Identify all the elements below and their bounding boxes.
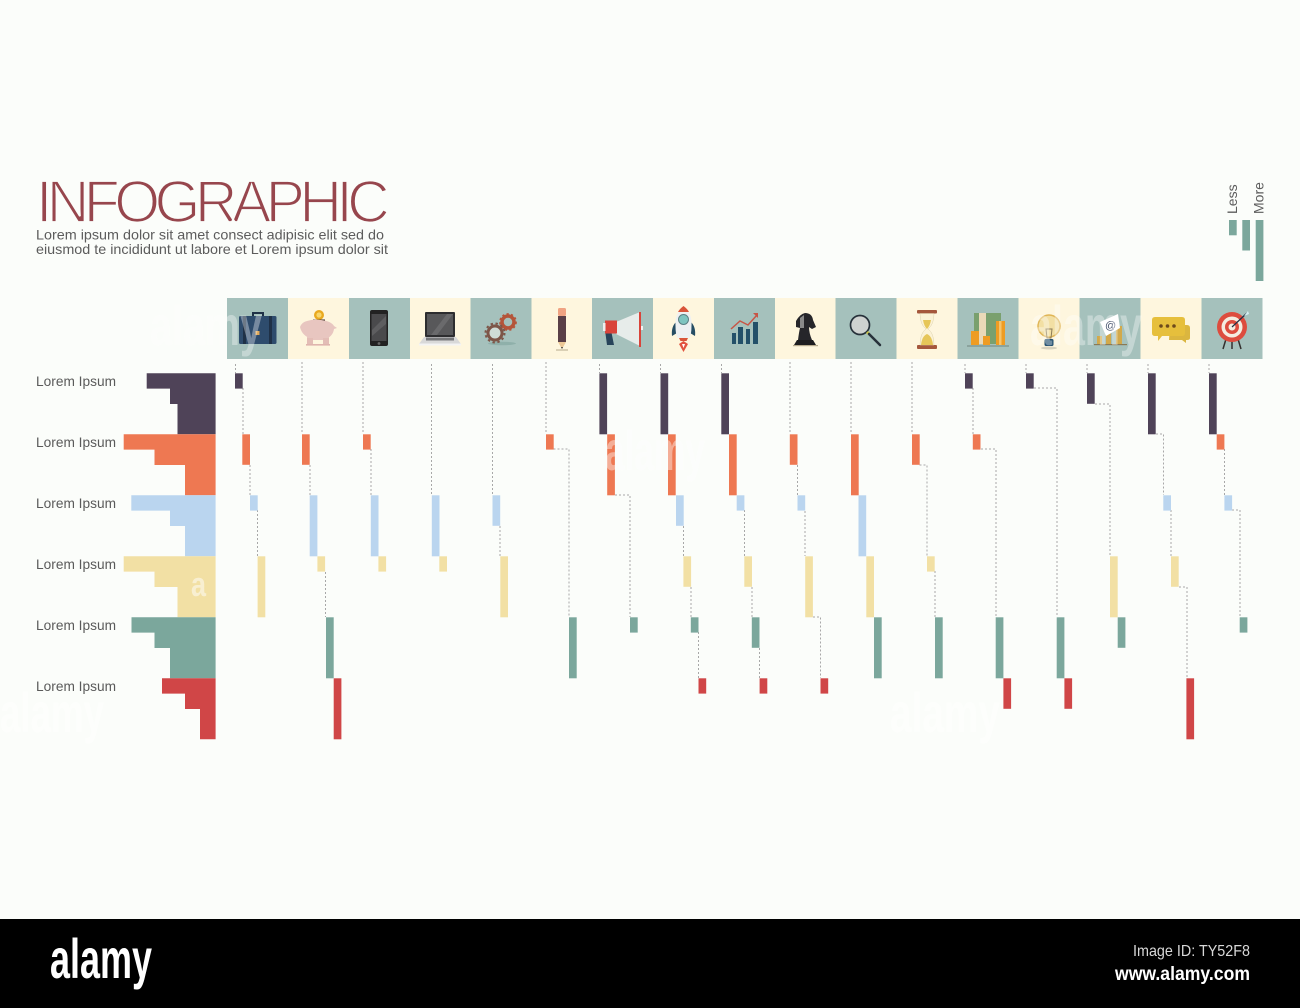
column 6: pencil bars <box>546 362 577 678</box>
description text: eiusmod te incididunt ut labore et Lorem ipsum dolor sit <box>36 241 388 257</box>
row labels: Lorem Ipsum <box>36 496 116 511</box>
row labels <box>36 374 116 694</box>
icon: target <box>1217 311 1249 349</box>
row labels: Lorem Ipsum <box>36 679 116 694</box>
column 11: magnifier bars <box>851 362 882 678</box>
row labels: Lorem Ipsum <box>36 435 116 450</box>
icon: laptop <box>419 312 461 346</box>
footer bar: alamy <box>50 927 152 990</box>
icon: briefcase <box>239 312 276 344</box>
column 1: briefcase bars <box>235 364 265 617</box>
icon: gears <box>486 314 516 345</box>
column 13: money bars <box>965 364 1011 709</box>
icon tile strip <box>227 298 1262 359</box>
column 14: light bulb bars <box>1026 364 1072 709</box>
icon: email and chart: @ <box>1105 320 1116 332</box>
row labels: Lorem Ipsum <box>36 374 116 389</box>
title: INFOGRAPHIC <box>36 169 388 235</box>
icon: pencil <box>556 308 568 350</box>
column 17: target bars <box>1209 364 1247 633</box>
icon: growth chart <box>731 313 758 344</box>
stepped summary: row 1 dark purple <box>147 373 216 434</box>
icon: rocket <box>672 306 695 352</box>
description text: Lorem ipsum dolor sit amet consect adipisic elit sed do <box>36 226 384 242</box>
footer bar: Image ID: TY52F8 <box>1133 943 1250 960</box>
column 15: email bars <box>1087 364 1125 648</box>
stepped summary: row 3 blue <box>131 495 216 556</box>
stepped summary: row 4 yellow <box>124 556 216 617</box>
footer bar <box>0 919 1300 1008</box>
column 5: gears bars <box>492 364 508 617</box>
watermarks: alamy <box>605 419 705 482</box>
column 8: rocket bars <box>660 364 706 694</box>
column 10: chess knight bars <box>790 362 828 694</box>
icon: money and coins <box>967 313 1009 347</box>
watermarks: a <box>191 566 207 604</box>
watermarks: alamy <box>890 681 1000 744</box>
watermarks: alamy <box>150 294 262 357</box>
icon: light bulb <box>1038 315 1060 350</box>
watermarks: alamy <box>1030 294 1142 357</box>
column 9: growth chart bars <box>721 364 767 694</box>
watermarks <box>0 294 1142 744</box>
description text <box>36 226 388 257</box>
footer bar: www.alamy.com <box>1114 964 1250 985</box>
icon: magnifying glass <box>850 316 880 345</box>
legend: less to more <box>1224 182 1266 281</box>
legend: less to more: More <box>1250 182 1266 214</box>
watermarks: alamy <box>0 681 104 744</box>
column 16: chat bars <box>1148 364 1194 739</box>
column 3: smartphone bars <box>363 362 386 572</box>
column 4: laptop bars <box>432 364 447 572</box>
column 7: megaphone bars <box>599 364 638 633</box>
icon: hourglass <box>917 310 937 349</box>
icon: chat bubbles <box>1152 317 1190 343</box>
stepped summary: row 5 green <box>132 617 216 678</box>
legend: less to more: Less <box>1224 184 1240 214</box>
column 2: piggy bank bars <box>302 362 341 739</box>
icon: chess knight <box>793 313 818 346</box>
stepped summary: row 2 orange <box>124 434 216 495</box>
icon: piggy bank <box>300 310 337 346</box>
row labels: Lorem Ipsum <box>36 557 116 572</box>
icon: megaphone <box>603 312 643 347</box>
stepped summary: row 6 red <box>162 678 216 739</box>
icon: smartphone <box>370 310 388 346</box>
column 12: hourglass bars <box>912 362 943 678</box>
row labels: Lorem Ipsum <box>36 618 116 633</box>
icon: email and chart <box>1094 314 1127 345</box>
